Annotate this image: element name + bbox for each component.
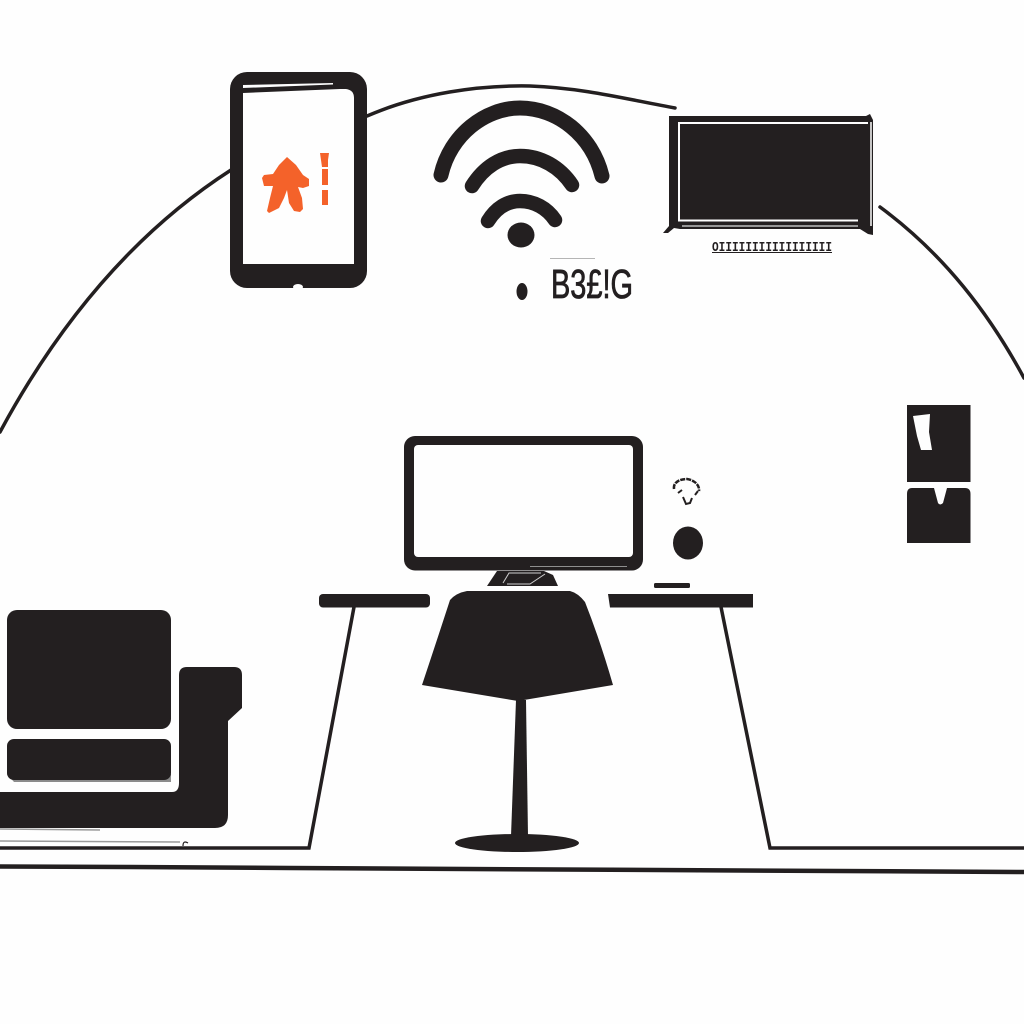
desk bbox=[319, 594, 753, 608]
floor and desk legs bbox=[0, 607, 1024, 872]
icon: wall cabinet bbox=[907, 405, 970, 543]
icon: orange app logo bbox=[262, 153, 329, 213]
icon: wall television bbox=[663, 114, 873, 256]
sofa bbox=[0, 610, 242, 828]
wifi label: B3£!G bbox=[551, 261, 633, 307]
television caption: OIIIIIIIIIIIIIIIII bbox=[712, 240, 832, 256]
icon: wifi signal bbox=[441, 108, 602, 248]
monitor stand bbox=[487, 571, 558, 586]
wifi label bbox=[516, 258, 633, 307]
icon: small lamp and ball on desk bbox=[654, 479, 703, 588]
icon: smartphone bbox=[230, 72, 367, 290]
office chair bbox=[422, 591, 613, 852]
icon: desktop monitor bbox=[404, 436, 643, 586]
arc: connection dome bbox=[0, 86, 1024, 432]
